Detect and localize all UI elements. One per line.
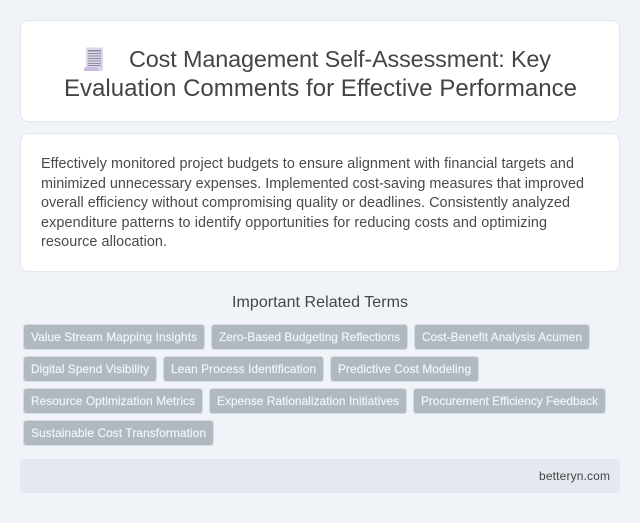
heading: important related terms: Important Related Terms (232, 294, 408, 311)
footer bar (20, 459, 620, 493)
tag: Digital Spend Visibility (31, 362, 149, 376)
panel: summary paragraph (20, 134, 620, 272)
paragraph text: minimized unnecessary expenses. Implemented cost-saving measures that improved (41, 176, 584, 192)
tag: Expense Rationalization Initiatives (217, 394, 399, 408)
tag: Lean Process Identification (171, 362, 316, 376)
footer credit: betteryn.com (539, 469, 610, 483)
tag (164, 356, 324, 382)
tag (24, 388, 202, 414)
tag (24, 356, 156, 382)
tag list (24, 324, 606, 446)
tag (414, 388, 606, 414)
tag: Sustainable Cost Transformation (31, 426, 206, 440)
tag (24, 420, 214, 446)
tag: Procurement Efficiency Feedback (421, 394, 598, 408)
paragraph text: expenditure patterns to identify opportunities for reducing costs and optimizing (41, 215, 547, 231)
paragraph text: Effectively monitored project budgets to ensure alignment with financial targets and (41, 156, 574, 172)
paragraph text (41, 156, 584, 250)
tag: Cost-Benefit Analysis Acumen (422, 330, 582, 344)
tag: Zero-Based Budgeting Reflections (219, 330, 400, 344)
icon: receipt scroll (84, 48, 103, 71)
paragraph text: overall efficiency without compromising quality or deadlines. Consistently analyzed (41, 195, 570, 211)
paragraph text: resource allocation. (41, 234, 167, 250)
tag (414, 324, 590, 350)
tag: Value Stream Mapping Insights (31, 330, 197, 344)
tag (210, 388, 406, 414)
panel: title card (20, 20, 620, 122)
title (64, 46, 577, 102)
tag (212, 324, 408, 350)
tag (24, 324, 204, 350)
tag: Resource Optimization Metrics (31, 394, 195, 408)
tag: Predictive Cost Modeling (338, 362, 471, 376)
title: Evaluation Comments for Effective Performance (64, 75, 577, 102)
title: Cost Management Self-Assessment: Key (129, 46, 551, 72)
tag (330, 356, 478, 382)
